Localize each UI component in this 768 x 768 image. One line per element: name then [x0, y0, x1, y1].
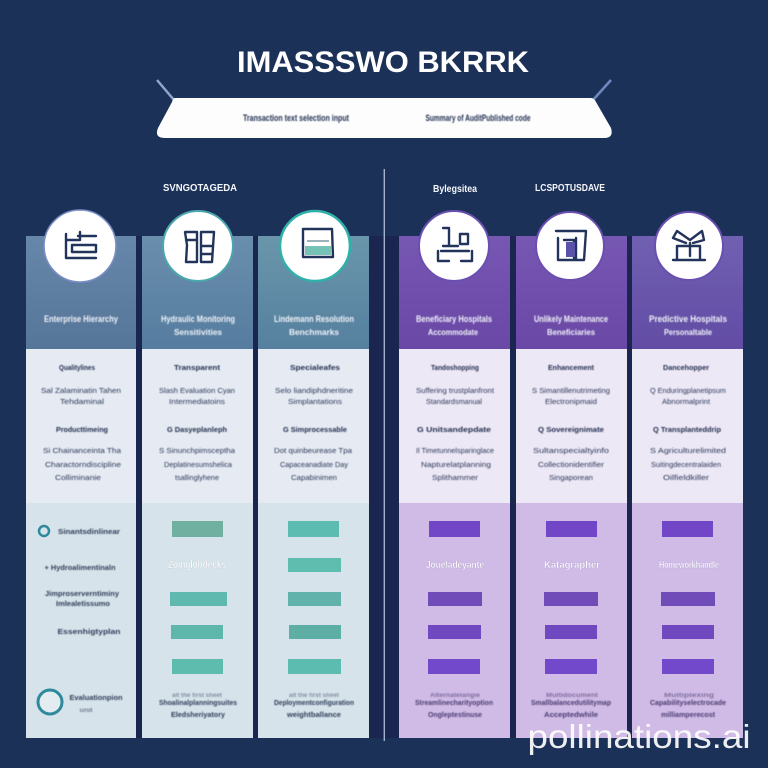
column 5 footer text: Multidocument	[546, 693, 598, 699]
column 1 details	[26, 349, 136, 503]
column 3 text: G Simprocessable	[283, 425, 347, 434]
column 4 footer text: Ongleptestinuse	[428, 710, 482, 719]
column 1 text: Sal Zalaminatin Tahen	[41, 386, 121, 395]
column 1 comparison	[26, 503, 136, 738]
icon: desk	[44, 210, 116, 282]
column 4 heading: Accommodate	[428, 328, 478, 337]
column 1 text: Si Chainanceinta Tha	[43, 446, 122, 455]
column 6 footer text: milliamperecost	[661, 710, 715, 719]
column 3 heading: Lindemann Resolution	[274, 314, 354, 324]
column 5 footer text: Acceptedwhile	[544, 710, 598, 719]
column 2 footer text: alt the first sheet	[172, 693, 222, 699]
column 6 header	[632, 236, 743, 349]
column 4 text: Standardsmanual	[426, 397, 482, 406]
column 2 details	[142, 349, 253, 503]
column 6 bars	[661, 521, 715, 674]
column 6 text: Dancehopper	[663, 363, 709, 372]
column 5 heading: Beneficiaries	[547, 328, 596, 337]
column 5 text: S Simantillenutrimeting	[532, 386, 610, 395]
column 6 heading: Personaltable	[664, 328, 713, 337]
watermark: pollinations.ai	[528, 718, 750, 755]
column 1 heading: Enterprise Hierarchy	[44, 314, 118, 324]
column 3 text: Capabinimen	[291, 473, 337, 482]
column 2 footer text: Shoalinalplanningsuites	[159, 698, 237, 707]
icon: large ring bullet	[38, 690, 62, 714]
column 4 details	[399, 349, 510, 503]
panel: column 5	[516, 212, 627, 738]
column 2 heading: Hydraulic Monitoring	[161, 314, 235, 324]
column 1 rows: Essenhigtyplan	[58, 627, 121, 636]
column 3 header	[258, 236, 369, 349]
column 6 heading	[649, 314, 727, 337]
column 6 text: S Agriculturelimited	[650, 446, 726, 455]
column 2 text: Intermediatoins	[169, 397, 225, 406]
column 5 text: Q Sovereignimate	[538, 425, 604, 434]
column 2 text: Deplatinesumshelica	[164, 460, 233, 469]
column 6 footer text: Multiplexing	[664, 693, 714, 699]
column 1 text: Qualitylines	[59, 363, 95, 372]
column 1 rows: und	[80, 708, 93, 714]
column 6 text: Q Transplanteddrip	[653, 425, 721, 434]
column 4 text: Napturelatplanning	[421, 460, 491, 469]
column 1 rows: Evaluationpion	[70, 693, 123, 702]
banner text: left: Transaction text selection input	[243, 113, 349, 123]
column 2 comparison	[142, 503, 253, 738]
column 3 footer text: alt the first sheet	[289, 693, 339, 699]
column 5 bars	[544, 521, 598, 674]
column 5 heading: Unlikely Maintenance	[534, 314, 608, 324]
column 2 heading	[161, 314, 235, 337]
column 6 text: Q Enduringplanetipsum	[650, 386, 726, 395]
column 4 footer text	[415, 693, 493, 719]
column 1 header	[26, 236, 136, 349]
column 4 header	[399, 236, 510, 349]
column 3 text: Dot quinbeurease Tpa	[274, 446, 353, 455]
column 4 text: Suffering trustplanfront	[416, 386, 495, 395]
column 3 text	[274, 363, 353, 482]
column 5 row text: Katagrapher	[544, 560, 600, 571]
column 1 text: Producttimeing	[56, 425, 108, 434]
column 5 text: Sultanspecialtyinfo	[533, 446, 609, 455]
column 6 footer text: Capabilityselectrocade	[650, 698, 726, 707]
column 3 heading	[274, 314, 354, 337]
column 3 text: Selo liandiphdneritine	[275, 386, 353, 395]
icon: gift	[655, 212, 723, 280]
icon: pillow	[280, 211, 350, 281]
column 5 comparison	[516, 503, 627, 738]
column 5 text	[532, 363, 610, 482]
column 2 text	[159, 363, 236, 482]
column 3 comparison	[258, 503, 369, 738]
column 1 rows: Jimproserverntiminy	[45, 589, 120, 598]
group label: right one: Bylegsitea	[433, 183, 477, 195]
column 1 text	[41, 363, 122, 482]
column 3 details	[258, 349, 369, 503]
column 5 text: Singaporean	[549, 473, 593, 482]
column 6 details	[632, 349, 743, 503]
column 2 heading: Sensitivities	[174, 328, 223, 337]
panel: column 6	[632, 212, 743, 738]
column 5 details	[516, 349, 627, 503]
column 3 bars	[288, 521, 341, 674]
panel: column 1	[26, 210, 136, 738]
group label: left: SVNGOTAGEDA	[163, 182, 237, 194]
column 2 text: Slash Evaluation Cyan	[159, 386, 235, 395]
panel: column 3	[258, 211, 369, 738]
column 6 comparison	[632, 503, 743, 738]
column 3 footer text: weightballance	[286, 710, 341, 719]
column 5 text: Collectionidentifier	[538, 460, 604, 469]
column 2 text: G Dasyeplanleph	[167, 425, 227, 434]
column 4 text: G Unitsandepdate	[417, 425, 491, 434]
title: IMASSSWO BKRRK	[237, 46, 529, 79]
column 5 heading	[534, 314, 608, 337]
column 5 footer text: Smallbalancedutilitymap	[531, 698, 611, 707]
column 4 heading: Beneficiary Hospitals	[416, 314, 492, 324]
panel: column 2	[142, 211, 253, 738]
column 4 text: Tandoshopping	[431, 363, 479, 372]
icon: ring bullet	[39, 526, 49, 536]
banner	[157, 80, 612, 138]
center divider	[384, 169, 385, 741]
column 1 text: Colliminanie	[55, 473, 101, 482]
column 3 footer text	[274, 693, 354, 719]
column 2 text: Transparent	[174, 363, 220, 372]
icon: book	[536, 212, 604, 280]
column 3 heading: Benchmarks	[289, 328, 340, 337]
column 4 bars	[428, 521, 482, 674]
icon: panels	[163, 211, 233, 281]
column 4 row text: Joueladeyante	[426, 560, 484, 571]
column 1 text: Tehdaminal	[60, 397, 104, 406]
column 2 footer text: Eledsheriyatory	[171, 710, 226, 719]
column 1 text: Charactorndiscipline	[45, 460, 121, 469]
panel: column 4	[399, 211, 510, 738]
column 2 header	[142, 236, 253, 349]
column 4 text: Il Timetunnelsparinglace	[416, 446, 494, 455]
column 6 text	[650, 363, 726, 482]
column 4 text: Splithammer	[432, 473, 479, 482]
column 3 text: Capaceanadiate Day	[280, 460, 348, 469]
column 5 text: Electronipmaid	[545, 397, 597, 406]
column 2 text: tsallinglyhene	[175, 473, 219, 482]
column 4 footer text: Alternatelangie	[430, 693, 481, 699]
column 1 rows: Sinantsdinlinear	[58, 527, 120, 536]
group label: right two: LCSPOTUSDAVE	[535, 182, 605, 194]
column 4 footer text: Streamlinecharityoption	[415, 698, 493, 707]
column 5 text: Enhancement	[548, 363, 594, 372]
column 4 comparison	[399, 503, 510, 738]
column 1 rows: Imlealetissumo	[56, 599, 110, 608]
column 1 rows: + Hydroalimentinaln	[44, 563, 116, 572]
column 4 heading	[416, 314, 492, 337]
column 6 text: Abnormalprint	[662, 397, 711, 406]
column 6 row text: Homeworkhandle	[659, 560, 719, 571]
column 6 text: Oilfieldkiller	[663, 473, 710, 482]
column 5 header	[516, 236, 627, 349]
column 5 footer text	[531, 693, 611, 719]
column 6 footer text	[650, 693, 726, 719]
column 3 text: Specialeafes	[290, 363, 340, 372]
banner text: right: Summary of AuditPublished code	[426, 113, 531, 123]
column 2 row text: Zomglobdecks	[168, 559, 226, 571]
column 2 footer text	[159, 693, 237, 719]
column 2 text: S Sinunchpimsceptha	[159, 446, 236, 455]
column 6 heading: Predictive Hospitals	[649, 314, 727, 324]
column 6 text: Suitingdecentralaiden	[651, 460, 721, 469]
column 2 bars	[170, 521, 227, 674]
column 3 text: Simplantations	[288, 397, 342, 406]
icon: desk and lamp	[419, 211, 489, 281]
column 1 rows	[44, 527, 123, 714]
column 4 text	[416, 363, 495, 482]
column 3 footer text: Deploymentconfiguration	[274, 698, 354, 707]
